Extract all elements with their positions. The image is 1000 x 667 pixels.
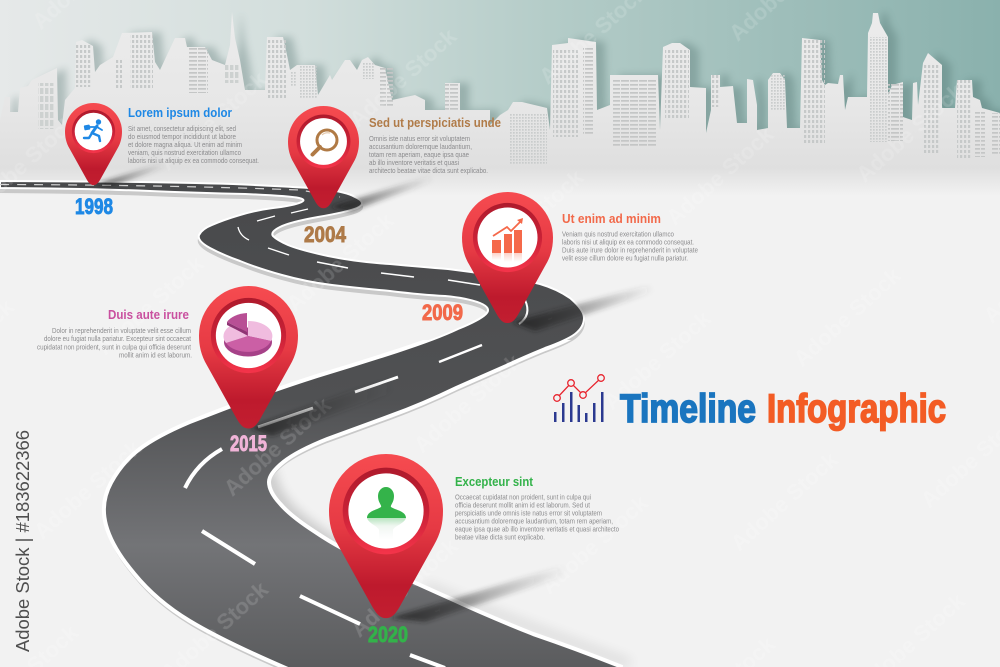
heading 2015: Duis aute irure xyxy=(108,308,189,322)
milestone 2020 xyxy=(329,454,619,647)
heading 2009: Ut enim ad minim xyxy=(562,212,661,226)
text block 2020: perspiciatis unde omnis iste natus error sit voluptatem xyxy=(455,508,602,518)
text block 2004: totam rem aperiam, eaque ipsa quae xyxy=(369,150,469,159)
text block 2009: laboris nisi ut aliquip ex ea commodo consequat. xyxy=(562,238,694,246)
text block 2009: Veniam quis nostrud exercitation ullamco xyxy=(562,230,674,238)
text block 2015: Dolor in reprehenderit in voluptate velit esse cillum xyxy=(52,326,191,335)
year 2015: 2015 xyxy=(230,431,267,456)
text block 2004: architecto beatae vitae dicta sunt explicabo. xyxy=(369,166,488,175)
city skyline xyxy=(0,12,1000,197)
text block 1998 xyxy=(128,124,259,165)
milestone 1998 xyxy=(65,103,259,219)
text block 2020: beatae vitae dicta sunt explicabo. xyxy=(455,532,545,542)
text block 2015: mollit anim id est laborum. xyxy=(119,350,192,360)
text block 2004: ab illo inventore veritatis et quasi xyxy=(369,158,459,167)
pin 2009 xyxy=(462,192,553,323)
heading 2004: Sed ut perspiciatis unde xyxy=(369,116,501,130)
title: Timeline xyxy=(620,387,756,431)
text block 2009: velit esse cillum dolore eu fugiat nulla pariatur. xyxy=(562,254,688,262)
text block 2004: accusantium doloremque laudantium, xyxy=(369,142,472,151)
icon: title chart xyxy=(554,375,604,422)
text block 2015: dolore eu fugiat nulla pariatur. Excepteur sint occaecat xyxy=(44,334,191,343)
icon: 3D pie chart xyxy=(223,313,272,356)
text block 2020: officia deserunt mollit anim id est laborum. Sed ut xyxy=(455,500,590,510)
text block 2020 xyxy=(455,492,619,542)
heading 1998: Lorem ipsum dolor xyxy=(128,106,232,120)
milestone 2004 xyxy=(288,106,501,247)
text block 1998: do eiusmod tempor incididunt ut labore xyxy=(128,132,236,141)
milestone 2009 xyxy=(422,192,698,325)
heading 2020: Excepteur sint xyxy=(455,475,534,489)
pin 2020 xyxy=(329,454,443,618)
pin 2004 xyxy=(288,106,359,208)
sky xyxy=(0,0,1000,175)
text block 2009: Duis aute irure dolor in reprehenderit in voluptate xyxy=(562,246,698,254)
text block 2020: accusantium doloremque laudantium, totam rem aperiam, xyxy=(455,516,613,526)
text block 2004: Omnis iste natus error sit voluptatem xyxy=(369,134,470,143)
winding road xyxy=(0,181,630,667)
year 2004: 2004 xyxy=(304,222,347,247)
pin 1998 xyxy=(65,103,122,185)
text block 2004 xyxy=(369,134,488,175)
text block 1998: et dolore magna aliqua. Ut enim ad minim xyxy=(128,140,242,149)
title xyxy=(620,387,946,431)
text block 2009 xyxy=(562,230,698,262)
pin 2015 xyxy=(199,286,298,429)
text block 1998: Sit amet, consectetur adipiscing elit, sed xyxy=(128,124,236,133)
text block 1998: laboris nisi ut aliquip ex ea commodo consequat. xyxy=(128,156,259,165)
text block 2020: eaque ipsa quae ab illo inventore veritatis et quasi architecto xyxy=(455,524,619,534)
pin shadows xyxy=(96,164,654,622)
text block 2015: cupidatat non proident, sunt in culpa qui officia deserunt xyxy=(37,342,191,352)
icon: person bust xyxy=(367,487,406,540)
text block 2020: Occaecat cupidatat non proident, sunt in culpa qui xyxy=(455,492,591,502)
milestone 2015 xyxy=(37,286,298,456)
text block 2015 xyxy=(37,326,192,360)
title: Infographic xyxy=(767,387,946,431)
icon: rising bar chart xyxy=(492,218,523,262)
year 2020: 2020 xyxy=(368,622,408,647)
stock id label: Adobe Stock | #183622366 xyxy=(13,430,33,652)
year 2009: 2009 xyxy=(422,300,463,325)
year 1998: 1998 xyxy=(75,194,113,219)
icon: running man xyxy=(84,119,102,141)
icon: magnifier xyxy=(312,130,337,154)
text block 1998: veniam, quis nostrud exercitation ullamco xyxy=(128,148,241,157)
lane markings xyxy=(0,184,527,667)
